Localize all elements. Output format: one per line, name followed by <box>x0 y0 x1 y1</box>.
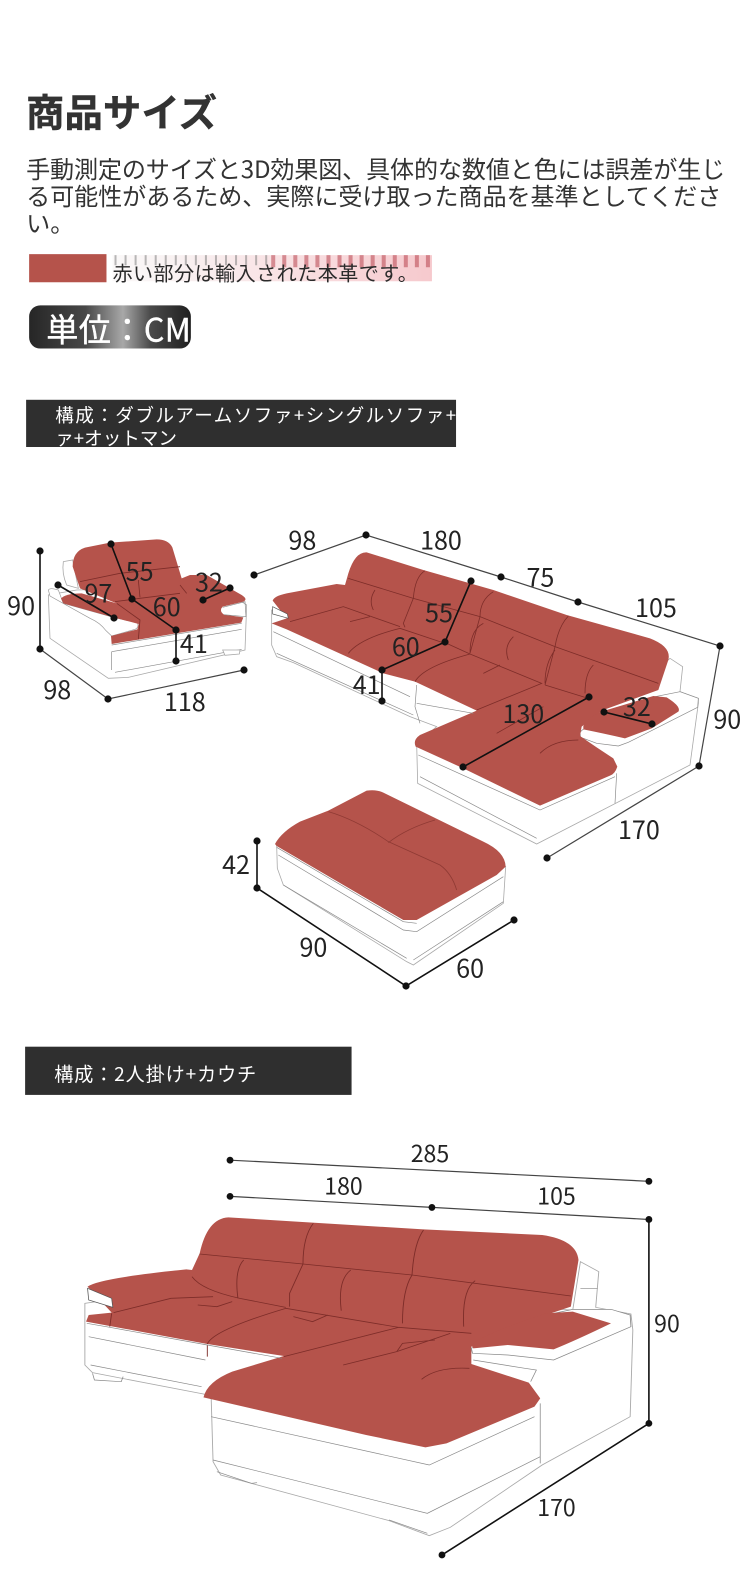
bottom sofa dimension lines <box>227 1157 652 1558</box>
bottom sofa dimension labels: 170 <box>537 1489 576 1523</box>
armchair diagram <box>7 539 248 719</box>
armchair dimension labels: 90 <box>7 587 35 623</box>
sofa dimension labels: 130 <box>502 695 544 731</box>
ottoman dimension labels: 60 <box>456 949 484 985</box>
ottoman dimension labels <box>222 846 484 985</box>
section bar 1: ァ+オットマン <box>55 424 177 451</box>
section bar 2 <box>25 1047 352 1095</box>
armchair dimension labels: 60 <box>153 588 181 624</box>
armchair dimension labels: 98 <box>43 671 71 707</box>
sofa dimension labels: 98 <box>288 521 316 557</box>
sofa dimension labels: 55 <box>425 594 453 630</box>
bottom sofa dimension labels: 90 <box>654 1305 680 1339</box>
sofa dimension labels: 60 <box>392 628 420 664</box>
bottom sofa dimension labels: 285 <box>411 1135 449 1169</box>
armchair dimension labels: 32 <box>195 564 223 600</box>
ottoman dimension labels: 42 <box>222 846 250 882</box>
sofa dimension labels <box>288 521 741 847</box>
sofa dimension labels: 41 <box>353 666 381 702</box>
sofa dimension labels: 105 <box>635 589 677 625</box>
two-seat sofa with chaise diagram <box>85 1135 680 1558</box>
armchair dimension labels: 41 <box>180 625 208 661</box>
armchair dimension labels: 118 <box>164 683 206 719</box>
section bar 1: 構成：ダブルアームソファ+シングルソファ+ <box>55 401 456 428</box>
unit badge: 単位：CM <box>46 306 191 352</box>
sofa dimension lines <box>250 531 724 862</box>
armchair dimension labels: 55 <box>126 553 154 589</box>
sofa dimension labels: 75 <box>526 559 554 595</box>
ottoman diagram <box>222 790 518 990</box>
sofa dimension labels: 170 <box>618 811 660 847</box>
section bar 2: 構成：2人掛け+カウチ <box>54 1060 256 1087</box>
description text: 手動測定のサイズと3D効果図、具体的な数値と色には誤差が生じ <box>26 150 725 185</box>
section bar 1 <box>26 400 456 451</box>
ottoman dimension labels: 90 <box>299 928 327 964</box>
sofa dimension labels: 180 <box>420 521 462 557</box>
ottoman dimension lines <box>253 837 518 990</box>
four-seat sofa with chaise diagram <box>250 521 741 862</box>
sofa dimension labels: 32 <box>623 688 651 724</box>
description text: る可能性があるため、実際に受け取った商品を基準としてくださ <box>26 177 721 212</box>
bottom sofa dimension labels: 180 <box>324 1167 363 1201</box>
description text: い。 <box>26 204 74 239</box>
armchair dimension labels <box>7 553 223 719</box>
sofa dimension labels: 90 <box>713 700 741 736</box>
armchair dimension lines <box>36 540 248 703</box>
bottom sofa dimension labels <box>324 1135 680 1523</box>
legend: red part is genuine leather <box>29 254 432 286</box>
title: 商品サイズ <box>26 83 217 138</box>
legend: red part is genuine leather: 赤い部分は輸入された本革です。 <box>113 257 418 286</box>
armchair dimension labels: 97 <box>85 575 112 611</box>
bottom sofa dimension labels: 105 <box>537 1177 576 1211</box>
description text <box>26 150 725 239</box>
